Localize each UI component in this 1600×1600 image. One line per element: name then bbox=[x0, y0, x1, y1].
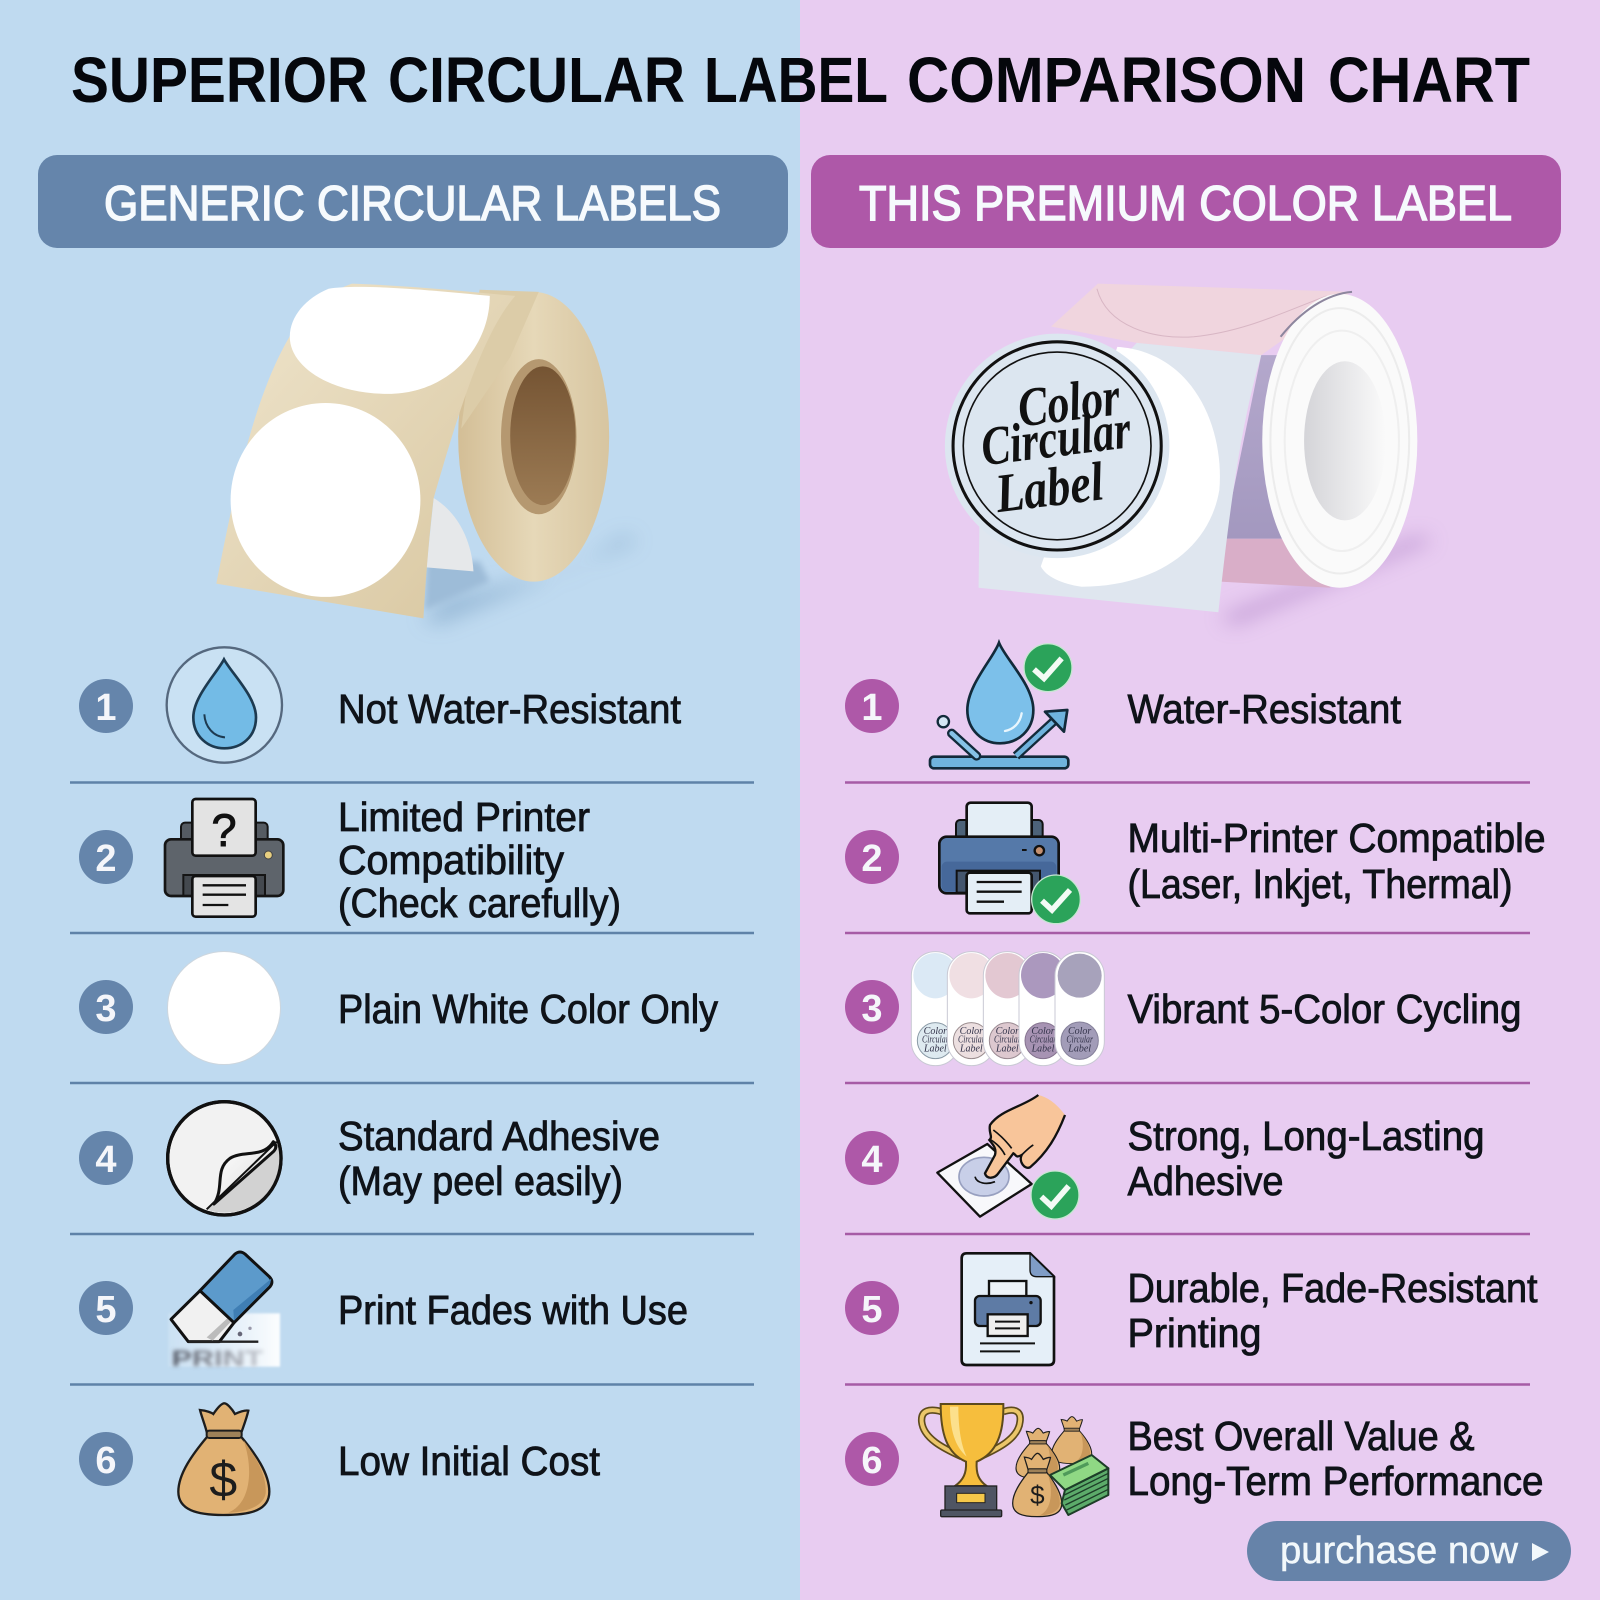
icon: five color label strips: Color bbox=[960, 1026, 983, 1037]
row 5: durable printing bbox=[845, 1253, 1538, 1365]
text: best overall value: Long-Term Performance bbox=[1128, 1458, 1544, 1504]
button: purchase now bbox=[1247, 1521, 1571, 1581]
sticker: color circular label: Circular bbox=[978, 398, 1134, 477]
icon: five color label strips: Label bbox=[923, 1043, 947, 1054]
sticker: color circular label: Color bbox=[1014, 365, 1124, 438]
text: water-resistant: Water-Resistant bbox=[1128, 686, 1402, 732]
icon: trophy, money bags and cash: $ bbox=[1030, 1480, 1045, 1510]
title: CIRCULAR bbox=[388, 44, 685, 116]
icon: trophy, money bags and cash bbox=[922, 1404, 1108, 1517]
text: durable fade-resistant printing bbox=[1128, 1265, 1538, 1356]
icon: printed document bbox=[962, 1253, 1054, 1365]
text: durable fade-resistant printing: Durable, Fade-Resistant bbox=[1128, 1265, 1538, 1311]
row 1: not water-resistant bbox=[79, 647, 682, 763]
text: strong long-lasting adhesive bbox=[1128, 1113, 1484, 1204]
right panel background bbox=[800, 0, 1600, 1600]
text: limited printer compatibility: (Check carefully) bbox=[338, 880, 621, 926]
icon: five color label strips: Label bbox=[1031, 1043, 1055, 1054]
number badge 1 bbox=[79, 679, 133, 733]
icon: peeling sticker bbox=[168, 1102, 281, 1215]
title bbox=[71, 44, 1530, 116]
number badge 1: 1 bbox=[95, 687, 117, 729]
title: SUPERIOR bbox=[71, 44, 368, 116]
row 3: plain white color only bbox=[79, 952, 718, 1064]
icon: five color label strips: Circular bbox=[1066, 1035, 1093, 1046]
icon: finger pressing label with check bbox=[937, 1095, 1079, 1219]
title: LABEL bbox=[704, 44, 888, 116]
text: vibrant 5-color cycling: Vibrant 5-Color Cycling bbox=[1128, 986, 1522, 1032]
text: strong long-lasting adhesive: Strong, Long-Lasting bbox=[1128, 1113, 1484, 1159]
row 3: vibrant 5-color cycling bbox=[845, 952, 1522, 1066]
icon: eraser over fading print bbox=[168, 1252, 280, 1371]
text: not water-resistant: Not Water-Resistant bbox=[338, 686, 682, 732]
icon: five color label strips: Label bbox=[995, 1043, 1019, 1054]
number badge 1 bbox=[845, 679, 899, 733]
icon: printer with question mark bbox=[165, 799, 283, 917]
number badge 3 bbox=[79, 980, 133, 1034]
icon: printer with question mark: ? bbox=[211, 805, 237, 856]
button: purchase now: purchase now bbox=[1280, 1530, 1519, 1572]
number badge 3: 3 bbox=[861, 988, 883, 1030]
number badge 2 bbox=[845, 830, 899, 884]
row 5: print fades with use bbox=[79, 1252, 688, 1371]
icon: five color label strips: Circular bbox=[1030, 1035, 1056, 1046]
number badge 2: 2 bbox=[861, 838, 883, 880]
comparison list: generic labels bbox=[79, 647, 718, 1515]
icon: five color label strips: Color bbox=[996, 1026, 1019, 1037]
sticker: color circular label bbox=[945, 334, 1169, 558]
number badge 6 bbox=[845, 1432, 899, 1486]
icon: five color label strips: Color bbox=[1031, 1026, 1055, 1037]
text: best overall value: Best Overall Value & bbox=[1128, 1413, 1474, 1459]
number badge 5 bbox=[845, 1281, 899, 1335]
text: multi-printer compatible bbox=[1128, 815, 1546, 907]
icon: five color label strips bbox=[911, 952, 1104, 1066]
panel header: this premium color label bbox=[811, 155, 1561, 248]
row 6: low initial cost bbox=[79, 1403, 601, 1515]
left panel background bbox=[0, 0, 800, 1600]
number badge 2: 2 bbox=[95, 838, 117, 880]
icon: five color label strips: Color bbox=[1068, 1026, 1091, 1037]
sticker: color circular label: Label bbox=[991, 450, 1107, 524]
icon: money bag: $ bbox=[209, 1452, 237, 1508]
row 1: water-resistant bbox=[845, 643, 1402, 768]
text: multi-printer compatible: (Laser, Inkjet, Thermal) bbox=[1128, 861, 1512, 907]
title: COMPARISON bbox=[907, 44, 1306, 116]
number badge 4 bbox=[79, 1131, 133, 1185]
text: strong long-lasting adhesive: Adhesive bbox=[1128, 1158, 1284, 1204]
text: standard adhesive: (May peel easily) bbox=[338, 1158, 623, 1204]
number badge 4 bbox=[845, 1131, 899, 1185]
icon: water drop repelled with check bbox=[930, 643, 1072, 768]
row 4: strong adhesive bbox=[845, 1095, 1484, 1219]
product image: generic beige label roll bbox=[216, 284, 638, 624]
icon: five color label strips: Label bbox=[1067, 1043, 1091, 1054]
text: multi-printer compatible: Multi-Printer Compatible bbox=[1128, 815, 1546, 861]
number badge 6: 6 bbox=[861, 1440, 883, 1482]
comparison list: premium label bbox=[845, 643, 1546, 1517]
text: low initial cost: Low Initial Cost bbox=[338, 1438, 601, 1484]
text: limited printer compatibility: Limited Printer bbox=[338, 794, 590, 840]
icon: blue printer with check bbox=[939, 803, 1080, 924]
text: print fades with use: Print Fades with Use bbox=[338, 1287, 688, 1333]
number badge 4: 4 bbox=[95, 1139, 117, 1181]
number badge 6 bbox=[79, 1432, 133, 1486]
text: best overall value bbox=[1128, 1413, 1544, 1504]
icon: five color label strips: Label bbox=[959, 1043, 983, 1054]
number badge 6: 6 bbox=[95, 1440, 117, 1482]
number badge 5: 5 bbox=[861, 1289, 883, 1331]
icon: water drop in circle bbox=[167, 647, 282, 763]
panel header: generic circular labels: GENERIC CIRCULAR LABELS bbox=[104, 177, 721, 231]
icon: five color label strips: Circular bbox=[958, 1035, 985, 1046]
row 2: multi-printer compatible bbox=[845, 803, 1546, 924]
row 4: standard adhesive bbox=[79, 1102, 660, 1215]
number badge 5: 5 bbox=[95, 1289, 117, 1331]
product image: premium color label roll bbox=[945, 284, 1434, 624]
text: plain white color only: Plain White Color Only bbox=[338, 986, 718, 1032]
row 2: limited printer compatibility bbox=[79, 794, 621, 926]
text: standard adhesive: Standard Adhesive bbox=[338, 1113, 660, 1159]
icon: money bag bbox=[178, 1403, 269, 1515]
number badge 3: 3 bbox=[95, 988, 117, 1030]
text: durable fade-resistant printing: Printing bbox=[1128, 1310, 1262, 1356]
number badge 4: 4 bbox=[861, 1139, 883, 1181]
icon: eraser over fading print: PRINT bbox=[172, 1346, 264, 1371]
number badge 3 bbox=[845, 980, 899, 1034]
number badge 1: 1 bbox=[861, 687, 883, 729]
panel header: generic circular labels bbox=[38, 155, 788, 248]
panel header: this premium color label: THIS PREMIUM COLOR LABEL bbox=[859, 177, 1512, 231]
row 6: best overall value bbox=[845, 1404, 1544, 1517]
number badge 5 bbox=[79, 1281, 133, 1335]
number badge 2 bbox=[79, 830, 133, 884]
text: standard adhesive bbox=[338, 1113, 660, 1204]
icon: five color label strips: Circular bbox=[922, 1035, 949, 1046]
icon: five color label strips: Circular bbox=[994, 1035, 1021, 1046]
text: limited printer compatibility: Compatibility bbox=[338, 837, 564, 883]
icon: plain white circle bbox=[168, 952, 280, 1064]
text: limited printer compatibility bbox=[338, 794, 621, 926]
icon: five color label strips: Color bbox=[924, 1026, 947, 1037]
title: CHART bbox=[1328, 44, 1530, 116]
